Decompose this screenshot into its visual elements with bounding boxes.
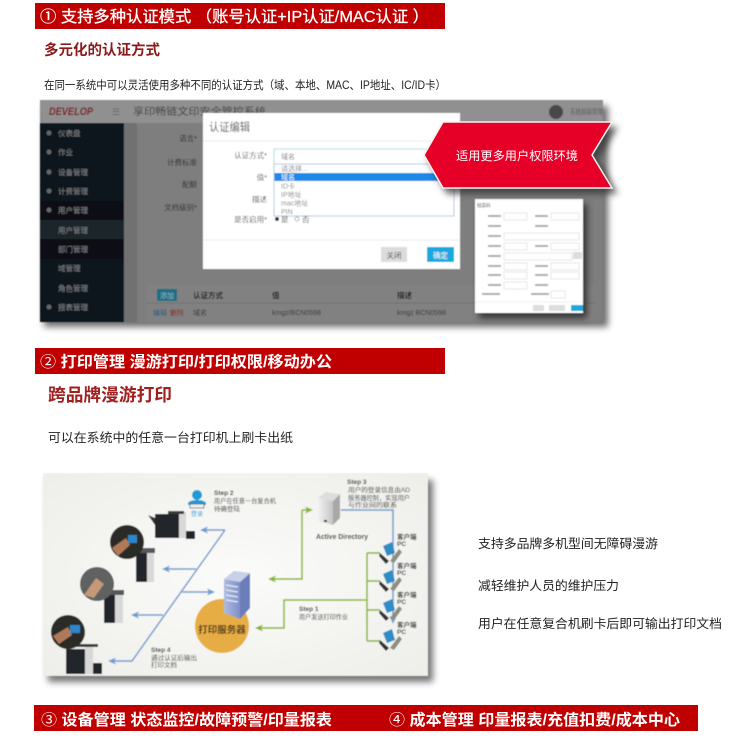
sidebar menu: 部门管理 [58,244,88,254]
small user dialog: 短菜码 [477,202,491,209]
user table: kmgz/BCN0598 [272,310,321,317]
client PCs: PC [397,599,406,606]
modal: authentication edit [203,113,460,269]
active directory server [316,492,369,541]
content area form labels [164,133,197,212]
modal: authentication edit: 认证编辑 [209,120,250,134]
modal: authentication edit: 认证方式* [234,150,267,160]
step 3 text [347,479,410,509]
step 4 text [151,647,197,669]
step 1 text [299,606,348,621]
step 2 text [214,490,276,513]
modal: authentication edit: 域名 [281,152,295,161]
callout ribbon [424,122,618,194]
text: roaming benefits [478,536,722,631]
top bar: ☰ [112,107,120,117]
step 1 text: Step 1 [299,606,319,613]
content area form labels: 语言* [179,133,197,143]
sidebar menu: 报表管理 [58,302,88,312]
content area form labels: 计费标准 [167,157,197,167]
client PCs [379,532,417,651]
sidebar menu [40,123,124,322]
modal: authentication edit: 确定 [433,250,448,260]
user table: 添加 [160,291,174,300]
user login icon [188,490,206,518]
step 3 text: 与作业间的联系 [348,500,398,509]
client PCs: 客户端 [397,561,417,570]
client PCs: 客户端 [397,532,417,541]
top bar: 系统超级管理 [570,107,603,116]
heading: cross-brand roaming print: 跨品牌漫游打印 [48,385,172,405]
top bar [40,100,603,123]
client PCs: PC [397,629,406,636]
card swipe photos [51,525,144,649]
sidebar menu: 设备管理 [58,167,88,177]
printers [66,511,195,674]
step 4 text: Step 4 [151,647,171,654]
header: sections 3 and 4: ③ 设备管理 状态监控/故障预警/印量报表 [41,710,333,729]
modal: authentication edit: 描述 [252,194,267,204]
client PCs: 客户端 [397,620,417,629]
step 3 text: Step 3 [347,479,367,486]
sidebar menu: 域管理 [58,263,81,273]
step 4 text: 通过认证后输出 [151,653,197,662]
user table: 删除 [170,308,184,317]
step 3 text: 服务器控制，实现用户 [348,493,410,502]
client PCs: PC [397,541,406,548]
header: sections 3 and 4: ④ 成本管理 印量报表/充值扣费/成本中心 [389,710,681,729]
text: roaming description: 可以在系统中的任意一台打印机上刷卡出纸 [48,430,294,445]
header: section 1: ① 支持多种认证模式 （账号认证+IP认证/MAC认证 ） [40,8,429,26]
panel: roaming print diagram [43,473,433,682]
dropdown list: mac地址 [281,198,308,208]
callout ribbon: 适用更多用户权限环境 [456,148,578,163]
step 1 text: 用户发送打印作业 [299,612,348,621]
modal: authentication edit: 否 [302,215,310,224]
user table: 值 [272,290,280,300]
step 2 text: 用户在任意一台复合机 [214,496,276,505]
panel: authentication screenshot [40,100,608,327]
sidebar menu: 仪表盘 [58,128,81,138]
step 2 text: 待确登陆 [214,504,240,513]
step 3 text: 用户的登录信息由AD [348,485,410,494]
heading: multi-mode authentication: 多元化的认证方式 [44,41,160,59]
sidebar menu: 计费管理 [58,186,88,196]
modal: authentication edit: 是 [281,215,289,224]
modal: authentication edit: 是否启用* [234,214,267,224]
header: section 2 [35,348,445,374]
text: authentication description: 在同一系统中可以灵活使用多种不同的认证方式（域、本地、MAC、IP地址、IC/ID卡） [44,78,446,92]
blue print routes [110,510,393,661]
top bar: 享印畅链文印安全管控系统 [133,105,266,118]
user table: kmgz BCN0598 [397,310,446,317]
content area form labels: 配额 [182,179,197,189]
dropdown list [274,164,454,216]
content area form labels: 文档级别* [164,202,197,212]
user table: 描述 [397,290,412,300]
user login icon: 登录 [191,510,203,518]
client PCs: 客户端 [397,590,417,599]
print server [195,571,250,653]
text: roaming benefits: 支持多品牌多机型间无障碍漫游 [478,536,658,551]
modal: authentication edit: 关闭 [386,250,402,260]
user table: 编辑 [153,308,167,317]
dropdown list: PIN [281,209,293,216]
header: section 1 [35,3,445,29]
modal: authentication edit: 值* [257,172,267,182]
green network routes [257,510,380,641]
sidebar menu: 用户管理 [58,205,88,215]
user table: 认证方式 [193,290,223,300]
step 4 text: 打印文档 [151,660,177,669]
small user dialog [475,199,587,318]
active directory server: Active Directory [316,532,369,541]
step 2 text: Step 2 [214,490,234,497]
text: roaming benefits: 减轻维护人员的维护压力 [478,578,619,593]
header: sections 3 and 4 [34,705,698,731]
user table [146,285,595,322]
text: roaming benefits: 用户在任意复合机刷卡后即可输出打印文档 [478,616,722,631]
dropdown list: IP地址 [281,190,302,199]
dropdown list: 域名 [281,172,295,182]
print server: 打印服务器 [198,624,246,636]
user table: 域名 [193,308,207,317]
sidebar menu: 作业 [58,147,73,157]
sidebar menu: 用户管理 [58,225,88,235]
dropdown list: 请选择... [281,164,308,173]
dropdown list: ID卡 [281,182,295,190]
header: section 2: ② 打印管理 漫游打印/打印权限/移动办公 [40,352,333,371]
top bar: DEVELOP [49,106,94,118]
sidebar menu: 角色管理 [58,283,88,293]
client PCs: PC [397,570,406,577]
